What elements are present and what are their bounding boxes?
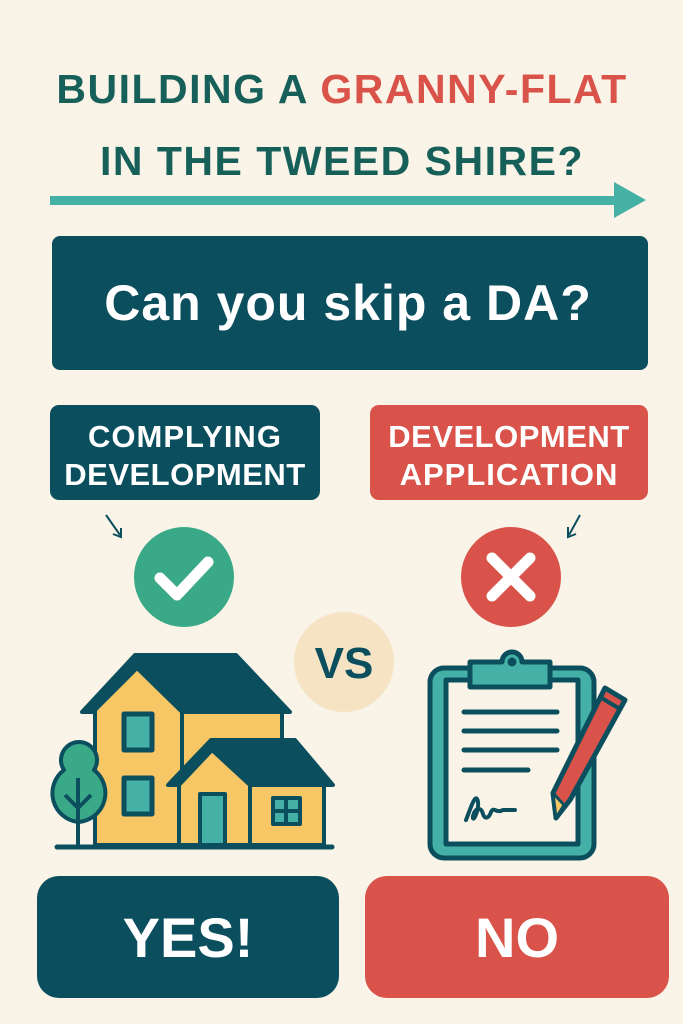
icon: check [134,527,234,627]
vs badge [294,612,394,712]
label: development application: DEVELOPMENT [388,419,630,454]
vs badge: VS [315,639,373,688]
arrow: header divider [50,182,646,218]
title: BUILDING A GRANNY-FLAT [56,66,628,112]
no button [365,876,669,998]
label: complying development: DEVELOPMENT [64,457,306,492]
arrow: right pointer [568,515,580,537]
title [56,66,628,184]
label: complying development: COMPLYING [88,419,282,454]
label: development application [370,405,648,500]
icon: cross [461,527,561,627]
icon: clipboard with pencil [430,652,625,858]
yes button: YES! [123,906,253,969]
label: complying development [50,405,320,500]
label: development application: APPLICATION [400,457,618,492]
no button: NO [475,906,559,969]
yes button [37,876,339,998]
icon: house [52,655,333,847]
arrow: left pointer [106,515,121,537]
title: IN THE TWEED SHIRE? [100,138,584,184]
question banner: Can you skip a DA? [104,275,592,331]
question banner [52,236,648,370]
